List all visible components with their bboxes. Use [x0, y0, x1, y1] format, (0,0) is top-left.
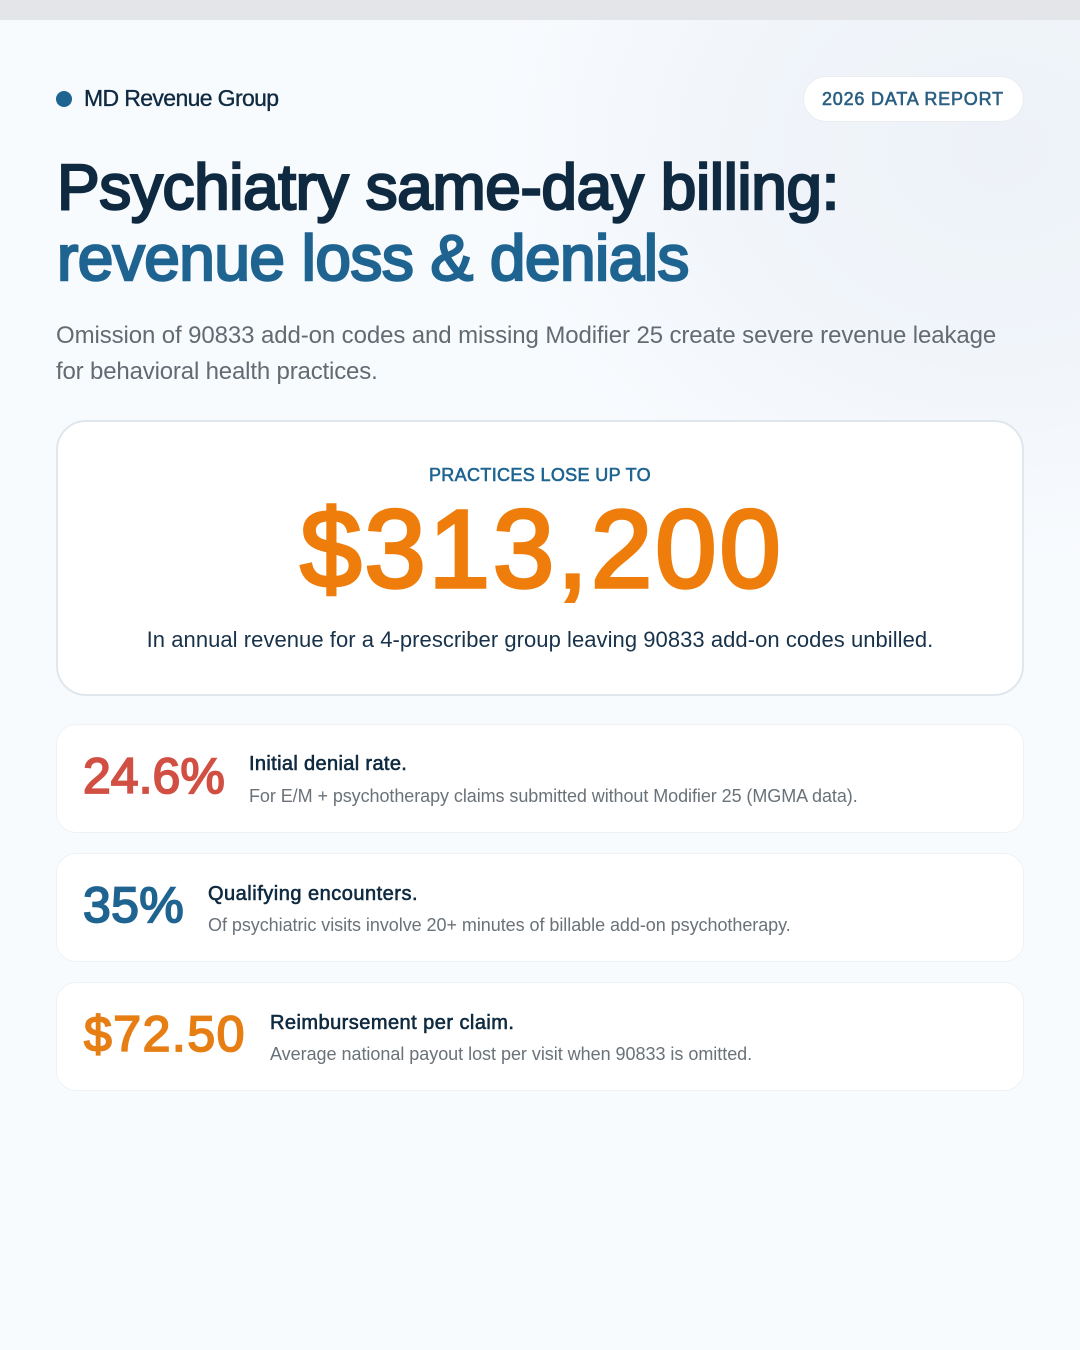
- brand: [56, 85, 278, 112]
- heading: Qualifying encounters.: [208, 883, 418, 905]
- description: For E/M + psychotherapy claims submitted without Modifier 25 (MGMA data).: [249, 786, 858, 806]
- value: 24.6%: [83, 748, 225, 804]
- top band: [0, 0, 1080, 20]
- value: 35%: [83, 877, 184, 933]
- description: Of psychiatric visits involve 20+ minutes of billable add-on psychotherapy.: [208, 915, 791, 935]
- stat label: PRACTICES LOSE UP TO: [429, 465, 651, 485]
- heading: Reimbursement per claim.: [270, 1012, 514, 1034]
- subtitle: [56, 322, 996, 385]
- card: qualifying encounters: [56, 853, 1024, 962]
- card: denial rate: [56, 724, 1024, 833]
- title: revenue loss & denials: [57, 222, 689, 294]
- subtitle: for behavioral health practices.: [56, 358, 378, 385]
- value: $72.50: [84, 1006, 246, 1062]
- title: [57, 151, 839, 294]
- subtitle: Omission of 90833 add-on codes and missing Modifier 25 create severe revenue leakage: [56, 322, 996, 349]
- brand dot: [56, 91, 72, 107]
- panel: headline stat: [56, 420, 1024, 696]
- title: Psychiatry same-day billing:: [57, 151, 839, 223]
- card: reimbursement: [56, 982, 1024, 1091]
- brand name: MD Revenue Group: [84, 85, 278, 111]
- description: Average national payout lost per visit when 90833 is omitted.: [270, 1044, 752, 1064]
- stat description: In annual revenue for a 4-prescriber group leaving 90833 add-on codes unbilled.: [147, 627, 933, 652]
- report badge: 2026 DATA REPORT: [822, 89, 1004, 109]
- stat value: $313,200: [300, 488, 784, 611]
- report badge: [803, 76, 1024, 122]
- heading: Initial denial rate.: [249, 753, 407, 775]
